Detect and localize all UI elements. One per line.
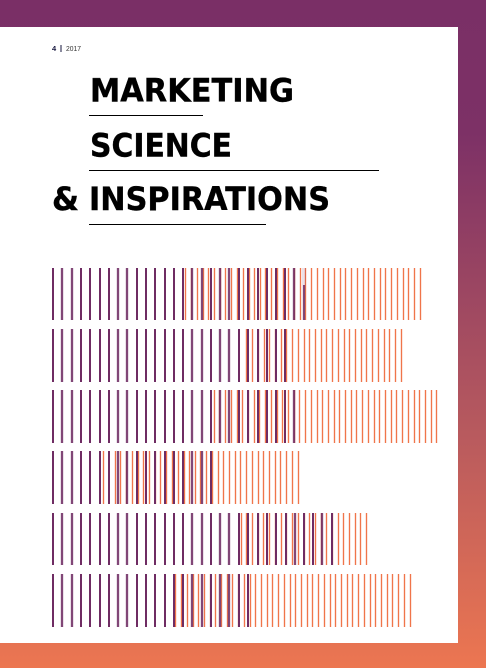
barcode row 4 [53,451,298,504]
barcode row 2 [53,329,402,382]
barcode chart [53,268,436,627]
barcode row 3 [53,390,436,443]
barcode row 5 [53,513,366,565]
title line: science: SCIENCE [90,126,232,164]
page number and year [52,44,81,53]
barcode row 6 [53,574,410,627]
title [52,72,379,225]
page number and year: 4 [52,44,57,53]
page number and year: 2017 [66,44,81,53]
title line: marketing: MARKETING [90,72,294,110]
title line: inspirations: INSPIRATIONS [89,180,330,218]
barcode row 1 [53,268,420,320]
ampersand: & [52,180,79,218]
